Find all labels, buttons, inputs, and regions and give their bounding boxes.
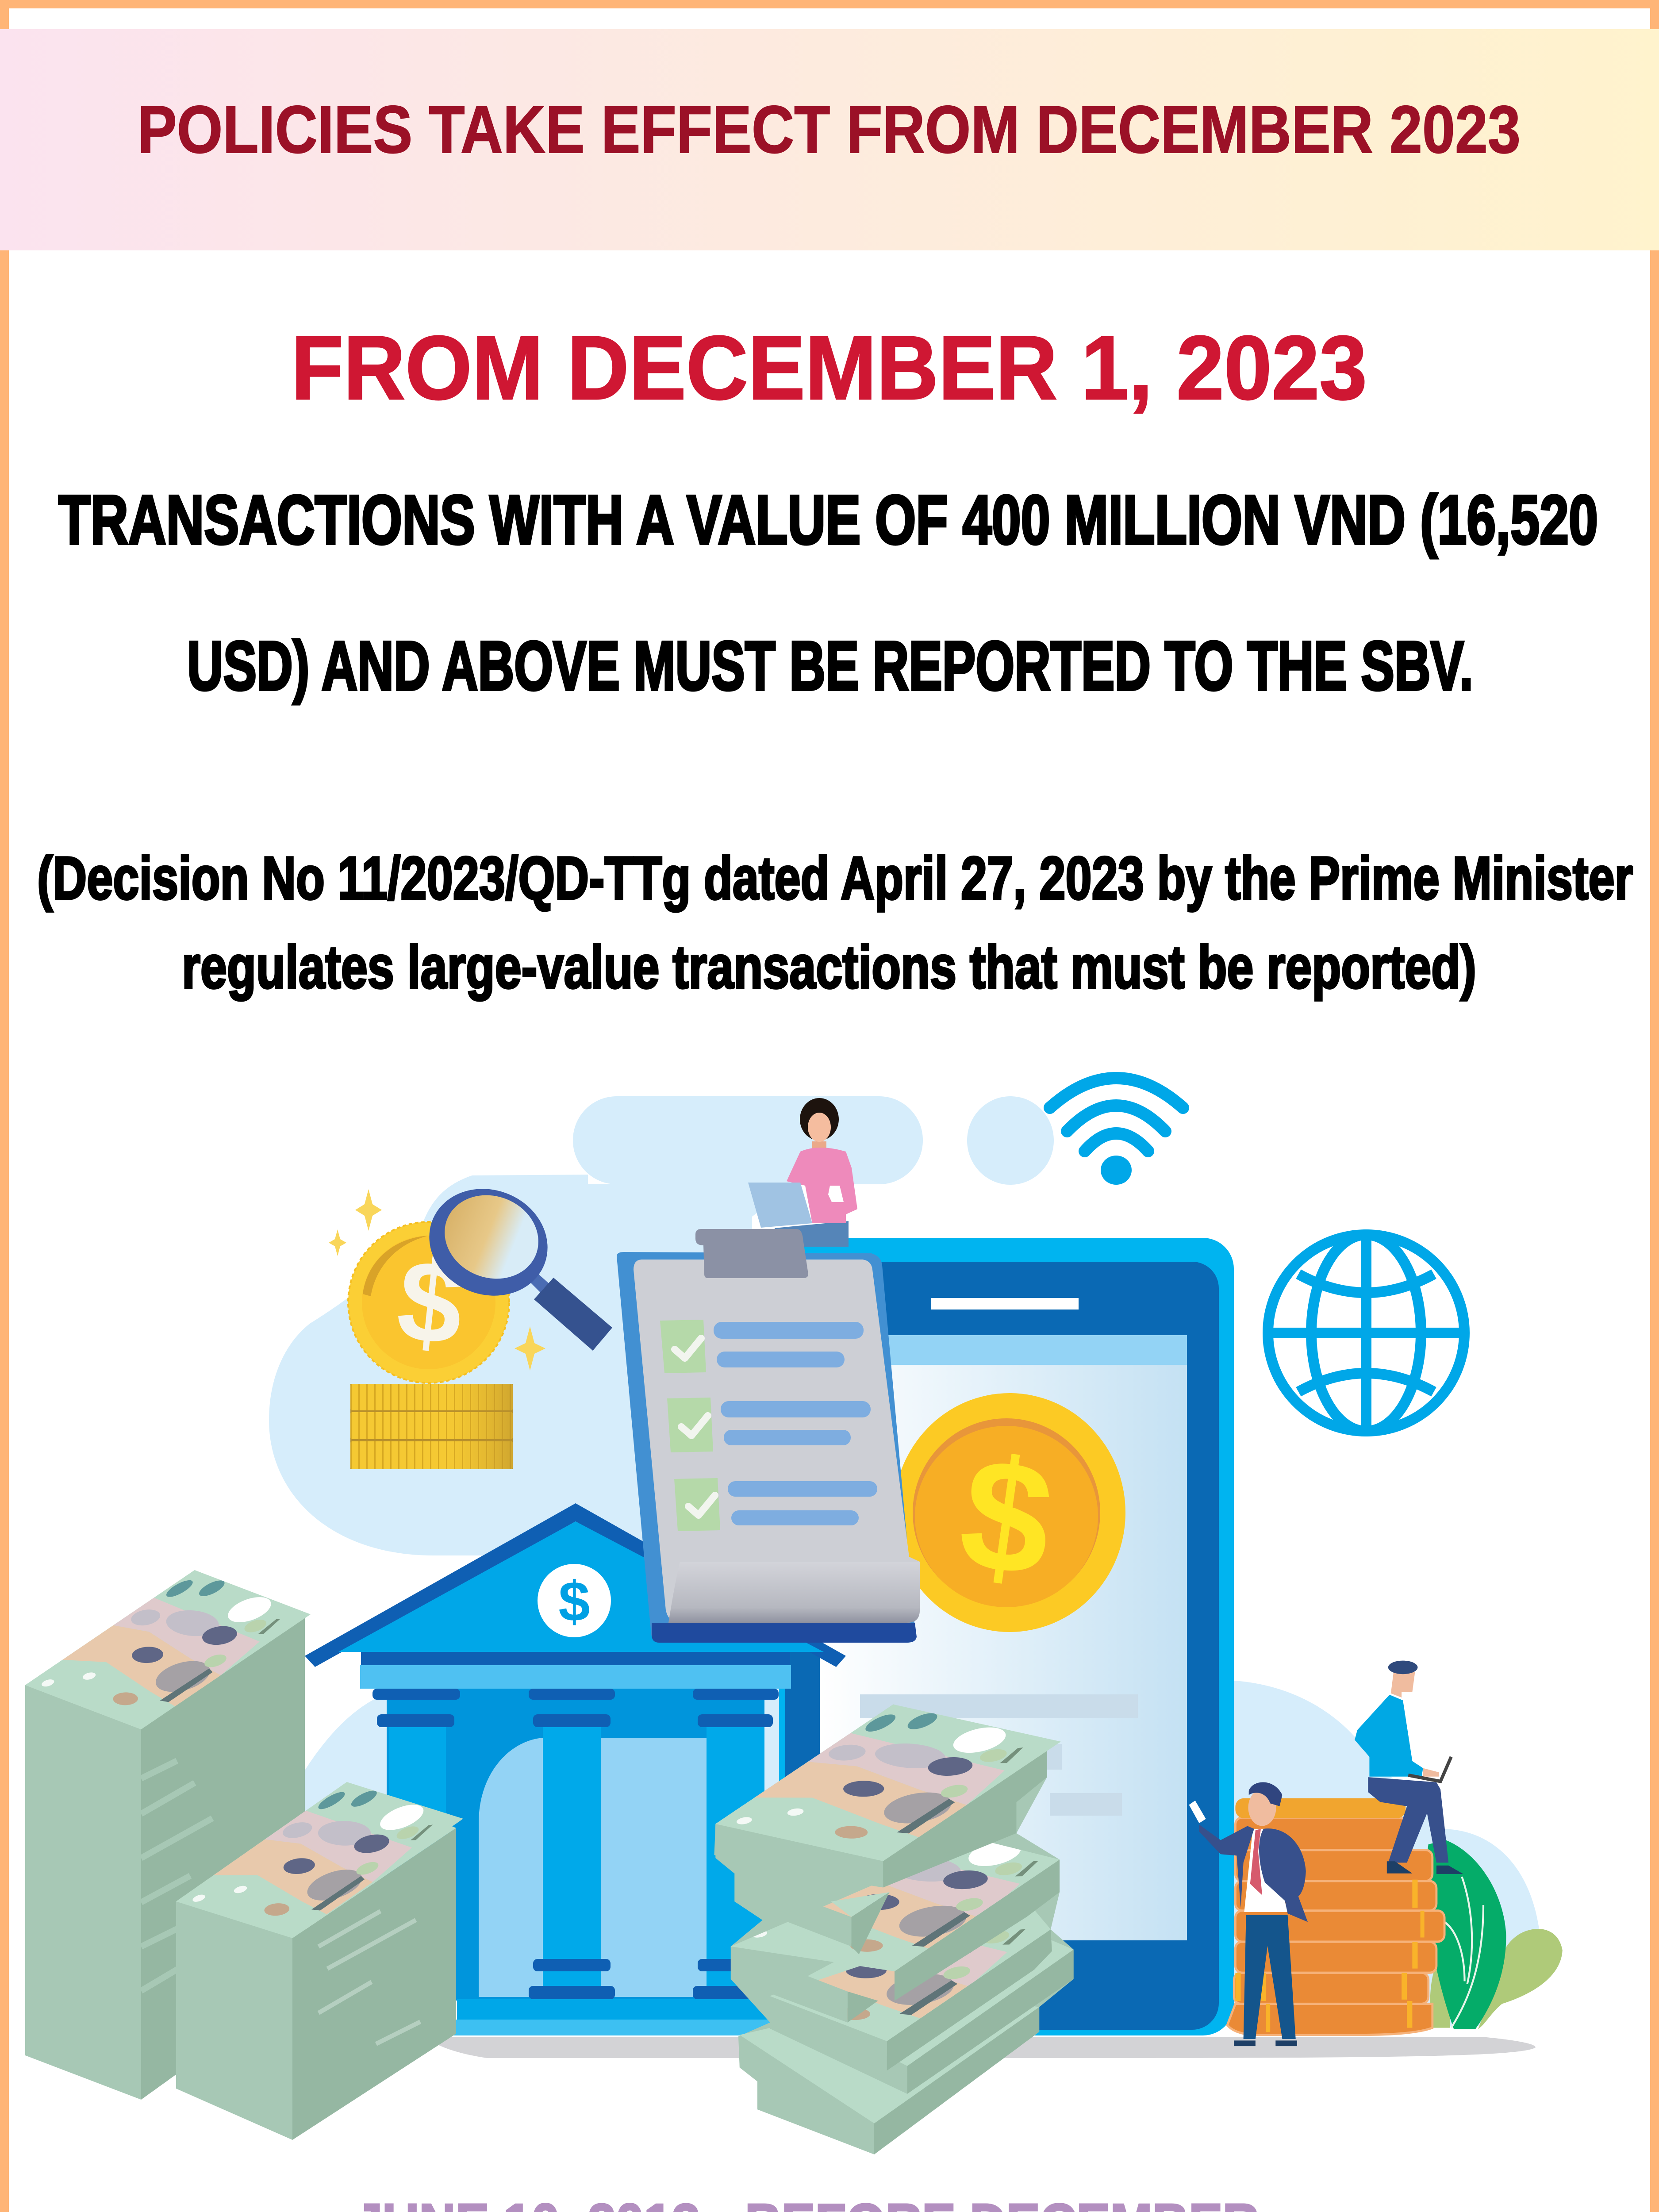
magnifier xyxy=(413,1171,612,1351)
clipboard paper xyxy=(634,1260,920,1623)
sitting man xyxy=(1355,1661,1463,1874)
bottom bundle xyxy=(740,1992,1039,2154)
gold coin with magnifier xyxy=(329,1171,612,1469)
ground shadow xyxy=(426,2037,1536,2058)
leaves xyxy=(1426,1840,1563,2029)
main statement xyxy=(58,481,1598,705)
standing man xyxy=(1189,1782,1308,2046)
sparkles xyxy=(329,1189,545,1371)
large coin on screen: $ xyxy=(950,1423,1063,1611)
fourth bundle xyxy=(770,1898,1074,2094)
bank building xyxy=(305,1503,886,2035)
checklist lines xyxy=(714,1322,877,1525)
clipboard xyxy=(617,1098,920,1643)
main date heading: FROM DECEMBER 1, 2023 xyxy=(291,317,1367,419)
top bundle xyxy=(714,1705,1061,1887)
bank emblem xyxy=(538,1564,611,1637)
stack silhouette xyxy=(715,1705,1074,2154)
cash stack centre xyxy=(714,1705,1076,2154)
wifi icon xyxy=(1050,1078,1183,1185)
men and coin stack xyxy=(1189,1661,1563,2046)
orange coin stack xyxy=(1227,1798,1444,2035)
phone xyxy=(779,1238,1234,2035)
bank roof xyxy=(305,1503,846,1667)
decision note xyxy=(37,845,1633,1001)
cloud behind man xyxy=(1234,1681,1540,2026)
bank body xyxy=(361,1652,790,1665)
third bundle xyxy=(771,1909,1052,2070)
second bundle xyxy=(731,1843,1060,2023)
dollar coin xyxy=(348,1222,509,1383)
clipboard woman xyxy=(748,1098,857,1247)
background clouds xyxy=(269,1096,1054,1902)
clipboard clip xyxy=(695,1229,808,1278)
phone screen xyxy=(820,1335,1187,1940)
cash stack left large xyxy=(25,1570,311,2100)
checkboxes xyxy=(660,1320,720,1531)
large coin on screen xyxy=(894,1393,1125,1632)
header banner xyxy=(0,29,1659,250)
cash stack left small xyxy=(176,1782,463,2140)
dollar coin: $ xyxy=(392,1234,469,1370)
illustration xyxy=(25,1078,1563,2154)
bank base xyxy=(457,1999,886,2020)
coin stack xyxy=(350,1384,513,1469)
globe icon xyxy=(1268,1235,1464,1431)
bank emblem: $ xyxy=(558,1570,590,1633)
